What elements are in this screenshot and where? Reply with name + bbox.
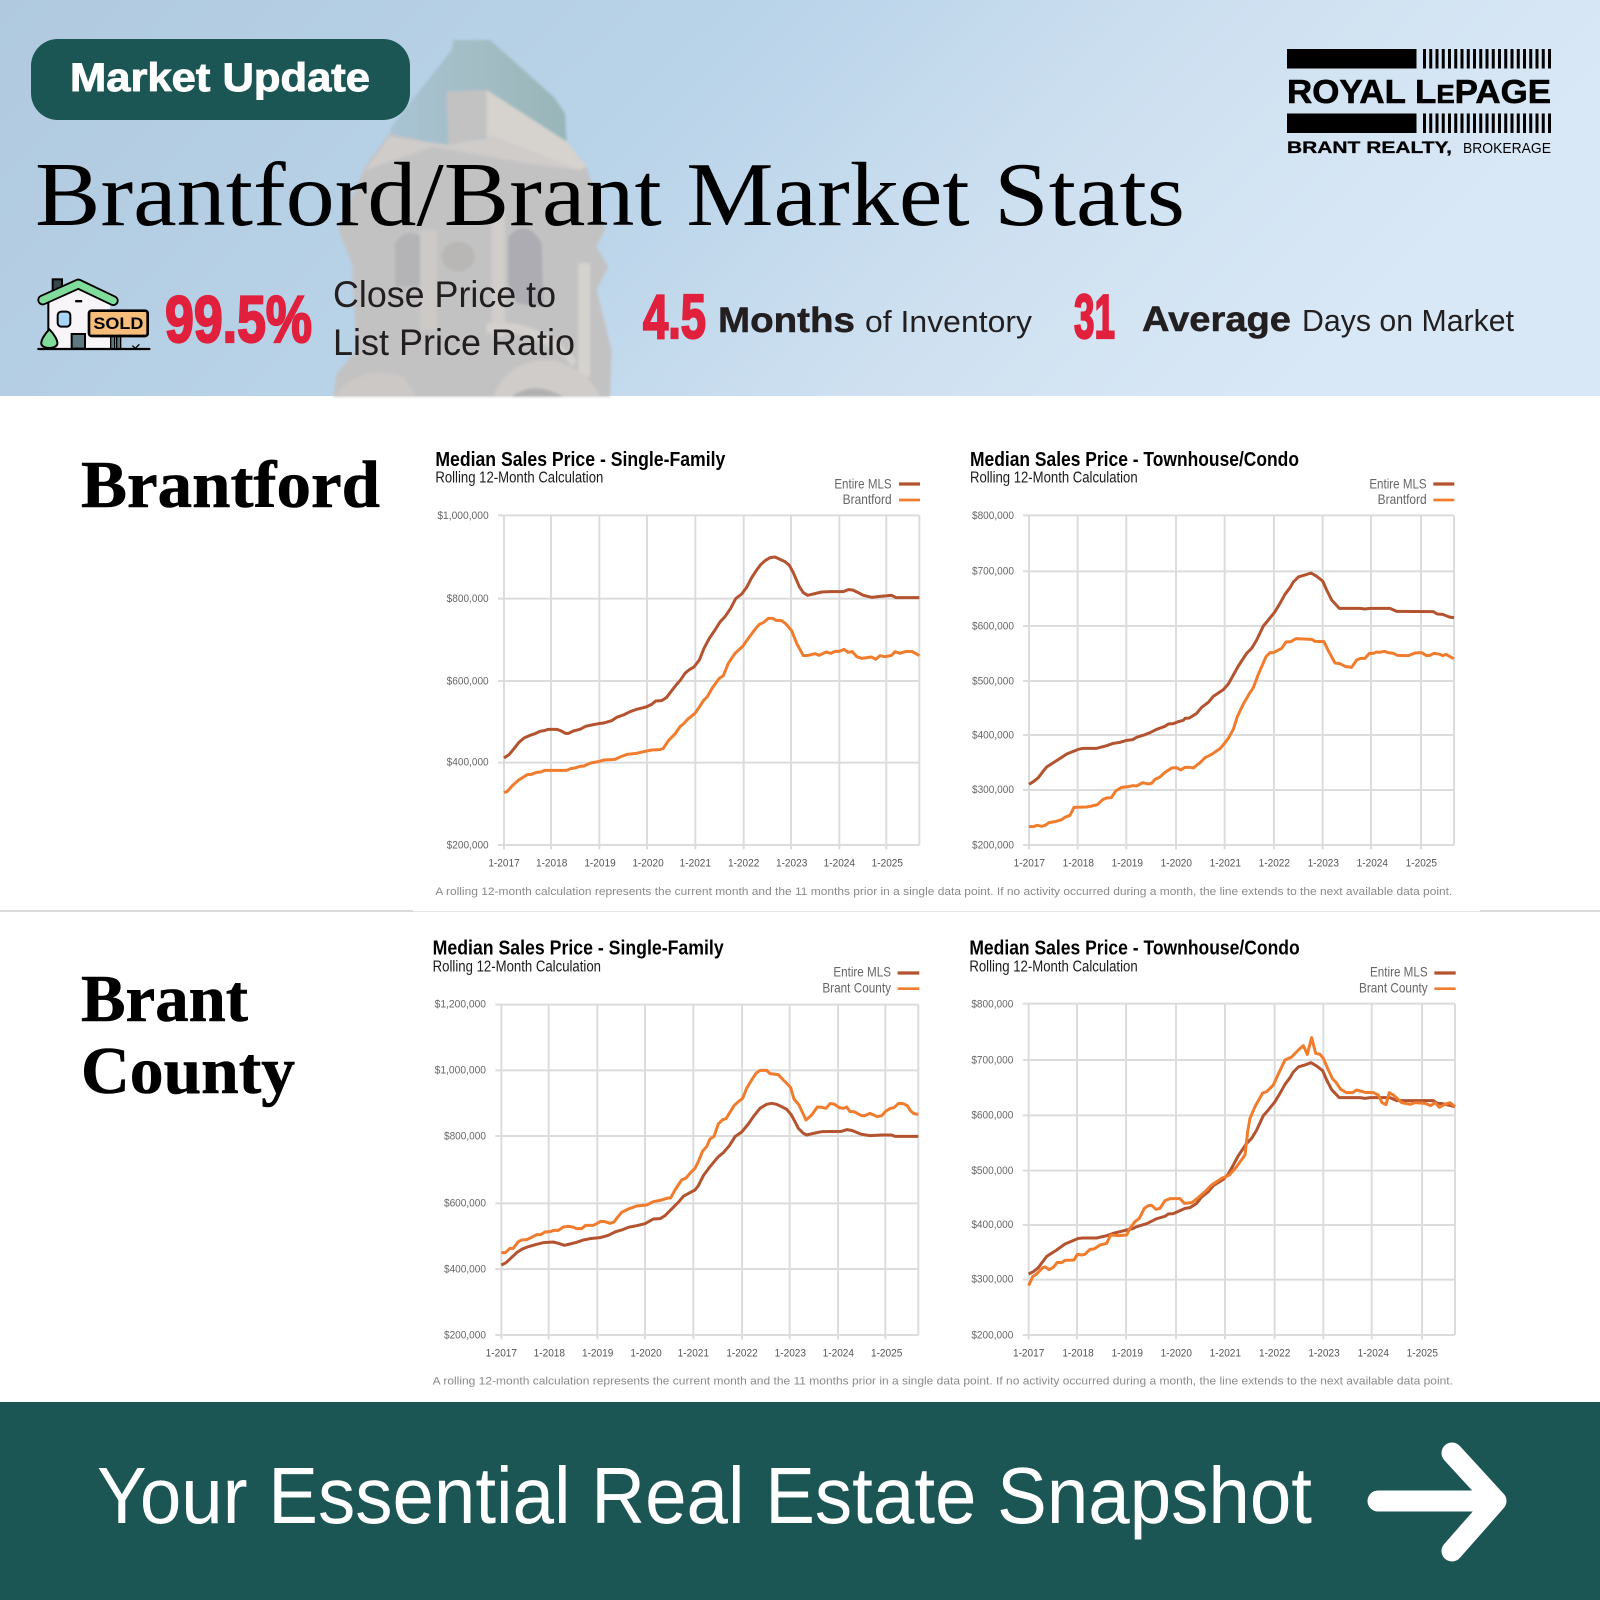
chart: Brantford townhouse/condo: Entire MLS: [1369, 475, 1427, 491]
stat: average days on market: 31: [1074, 283, 1115, 352]
chart: Brant County single-family: Median Sales Price - Single-Family: [433, 937, 724, 959]
chart: Brantford single-family: $200,000: [447, 840, 489, 852]
chart: Brant County single-family: 1-2021: [678, 1348, 709, 1360]
stat: average days on market: [1074, 283, 1514, 352]
chart: Brantford single-family: 1-2017: [488, 858, 520, 870]
chart: Brantford single-family: 1-2024: [824, 858, 855, 870]
chart: Brantford townhouse/condo: 1-2025: [1406, 858, 1437, 870]
chart: Brant County townhouse/condo: $300,000: [971, 1274, 1013, 1286]
stat: months of inventory: Months: [718, 301, 855, 340]
stat: close price ratio: Close Price to: [333, 274, 556, 315]
icon: right arrow: [1378, 1453, 1496, 1551]
chart: Brantford single-family: 1-2018: [536, 858, 567, 870]
chart: Brantford townhouse/condo: 1-2018: [1063, 858, 1094, 870]
chart: Brantford townhouse/condo: $500,000: [972, 676, 1014, 688]
chart: Brant County single-family: 1-2018: [534, 1348, 565, 1360]
chart: Brantford townhouse/condo: 1-2022: [1259, 858, 1290, 870]
stat: average days on market: Days on Market: [1302, 303, 1514, 338]
chart: Brant County townhouse/condo: $600,000: [971, 1109, 1013, 1121]
footer text: Your Essential Real Estate Snapshot: [97, 1451, 1312, 1540]
chart: Brant County single-family: 1-2024: [823, 1348, 854, 1360]
badge: Market Update: [31, 39, 410, 120]
chart: Brantford single-family: $1,000,000: [437, 510, 489, 522]
chart: Brantford single-family: Entire MLS: [834, 475, 892, 491]
chart: Brant County townhouse/condo: 1-2019: [1112, 1348, 1143, 1360]
chart: Brant County single-family: Brant County: [822, 979, 891, 995]
icon: sold house: [38, 279, 149, 349]
chart: Brantford single-family: 1-2022: [728, 858, 759, 870]
heading: Brantford: Brantford: [81, 448, 380, 522]
chart: Brant County single-family: $1,000,000: [435, 1065, 486, 1077]
chart: Brant County single-family: $400,000: [444, 1263, 486, 1275]
chart: Brantford townhouse/condo: $400,000: [972, 729, 1014, 741]
chart: Brant County townhouse/condo: $700,000: [971, 1054, 1013, 1066]
stat: close price ratio: [165, 274, 575, 363]
photo: clock tower: [333, 40, 612, 397]
stat: average days on market: Average: [1142, 300, 1291, 339]
divider: [0, 910, 1600, 912]
heading: Brant County: Brant: [81, 962, 249, 1036]
chart: Brant County townhouse/condo: Median Sales Price - Townhouse/Condo: [969, 937, 1300, 959]
chart: Brant County single-family: $1,200,000: [435, 999, 486, 1011]
chart: Brant County single-family: $200,000: [444, 1329, 486, 1341]
chart: Brantford single-family: Brantford: [843, 491, 892, 507]
stat: months of inventory: 4.5: [643, 283, 706, 352]
chart: Brantford townhouse/condo: 1-2020: [1161, 858, 1192, 870]
logo: Royal LePage: [1287, 49, 1551, 157]
chart: Brant County townhouse/condo: $200,000: [971, 1329, 1013, 1341]
stat: close price ratio: 99.5%: [165, 282, 312, 356]
chart: Brant County townhouse/condo: Entire MLS: [1370, 964, 1428, 980]
chart: Brantford single-family: $400,000: [447, 757, 489, 769]
chart: Brantford townhouse/condo: $300,000: [972, 784, 1014, 796]
chart: Brant County townhouse/condo: Rolling 12-Month Calculation: [969, 959, 1138, 976]
chart: Brantford single-family: $600,000: [447, 676, 489, 688]
chart: Brant County townhouse/condo: 1-2021: [1210, 1348, 1241, 1360]
chart: Brant County townhouse/condo: $500,000: [971, 1165, 1013, 1177]
chart: Brant County single-family: Rolling 12-Month Calculation: [433, 959, 601, 976]
chart: Brant County townhouse/condo: $400,000: [971, 1219, 1013, 1231]
chart: Brantford single-family: 1-2023: [776, 858, 807, 870]
chart: Brantford single-family: Rolling 12-Month Calculation: [435, 470, 603, 487]
chart: Brantford townhouse/condo: Median Sales Price - Townhouse/Condo: [970, 449, 1299, 471]
chart: Brant County townhouse/condo: 1-2018: [1062, 1348, 1094, 1360]
chart: Brant County townhouse/condo: $800,000: [971, 999, 1013, 1011]
stat: months of inventory: of Inventory: [865, 304, 1033, 339]
chart: Brantford townhouse/condo: 1-2024: [1357, 858, 1388, 870]
chart: Brant County townhouse/condo: 1-2023: [1308, 1348, 1340, 1360]
chart: Brant County townhouse/condo: 1-2022: [1259, 1348, 1290, 1360]
logo: Royal LePage: ROYAL L EPAGE: [1287, 73, 1551, 110]
stat: months of inventory: [643, 283, 1033, 352]
title: Brantford/Brant Market Stats: [35, 144, 1185, 245]
chart: Brantford townhouse/condo: Rolling 12-Month Calculation: [970, 470, 1138, 487]
chart: Brant County single-family: Entire MLS: [833, 964, 891, 980]
chart: Brantford townhouse/condo: $200,000: [972, 840, 1014, 852]
chart: Brant County single-family: 1-2023: [775, 1348, 806, 1360]
chart: Brant County single-family: $800,000: [444, 1130, 486, 1142]
chart: Brantford single-family: 1-2021: [680, 858, 711, 870]
chart: Brantford townhouse/condo: 1-2017: [1014, 858, 1045, 870]
chart: Brantford townhouse/condo: 1-2019: [1112, 858, 1143, 870]
chart: Brantford single-family: 1-2019: [584, 858, 616, 870]
chart: Brant County single-family: [433, 937, 1453, 1387]
stat: close price ratio: List Price Ratio: [333, 322, 575, 363]
logo: Royal LePage: BRANT REALTY,: [1287, 138, 1452, 157]
chart: Brantford single-family: A rolling 12-month calculation represents the current month and the 11 months prior in a single data point. If no activity occurred during a month, the line extends to the next available data point.: [435, 886, 1452, 898]
chart: Brantford townhouse/condo: $600,000: [972, 620, 1014, 632]
chart: Brantford single-family: Median Sales Price - Single-Family: [435, 449, 725, 471]
chart: Brantford single-family: $800,000: [447, 593, 489, 605]
heading: Brant County: County: [81, 1034, 295, 1108]
panel: footer banner: [0, 1402, 1600, 1600]
chart: Brantford townhouse/condo: $800,000: [972, 510, 1014, 522]
chart: Brant County single-family: A rolling 12-month calculation represents the current month and the 11 months prior in a single data point. If no activity occurred during a month, the line extends to the next available data point.: [433, 1375, 1453, 1387]
chart: Brant County townhouse/condo: Brant County: [1359, 979, 1428, 995]
chart: Brant County single-family: 1-2020: [630, 1348, 662, 1360]
chart: Brant County single-family: $600,000: [444, 1198, 486, 1210]
chart: Brantford single-family: [435, 449, 1452, 898]
chart: Brant County townhouse/condo: 1-2025: [1407, 1348, 1438, 1360]
chart: Brantford townhouse/condo: 1-2021: [1210, 858, 1241, 870]
chart: Brantford single-family: 1-2025: [872, 858, 903, 870]
logo: Royal LePage: BROKERAGE: [1463, 140, 1551, 157]
chart: Brant County single-family: 1-2017: [486, 1348, 517, 1360]
chart: Brantford single-family: 1-2020: [632, 858, 664, 870]
chart: Brant County single-family: 1-2022: [726, 1348, 758, 1360]
chart: Brant County townhouse/condo: 1-2020: [1161, 1348, 1192, 1360]
chart: Brantford townhouse/condo: [970, 449, 1454, 870]
chart: Brant County single-family: 1-2025: [871, 1348, 902, 1360]
chart: Brant County townhouse/condo: [969, 937, 1456, 1360]
chart: Brantford townhouse/condo: $700,000: [972, 565, 1014, 577]
chart: Brant County townhouse/condo: 1-2024: [1358, 1348, 1389, 1360]
heading: Brant County: [81, 962, 295, 1108]
panel: header banner: [0, 0, 1600, 397]
chart: Brantford townhouse/condo: Brantford: [1378, 491, 1427, 507]
chart: Brant County townhouse/condo: 1-2017: [1013, 1348, 1044, 1360]
icon: sold house: SOLD: [93, 314, 143, 333]
chart: Brantford townhouse/condo: 1-2023: [1308, 858, 1339, 870]
badge: Market Update: Market Update: [70, 56, 370, 100]
chart: Brant County single-family: 1-2019: [582, 1348, 613, 1360]
